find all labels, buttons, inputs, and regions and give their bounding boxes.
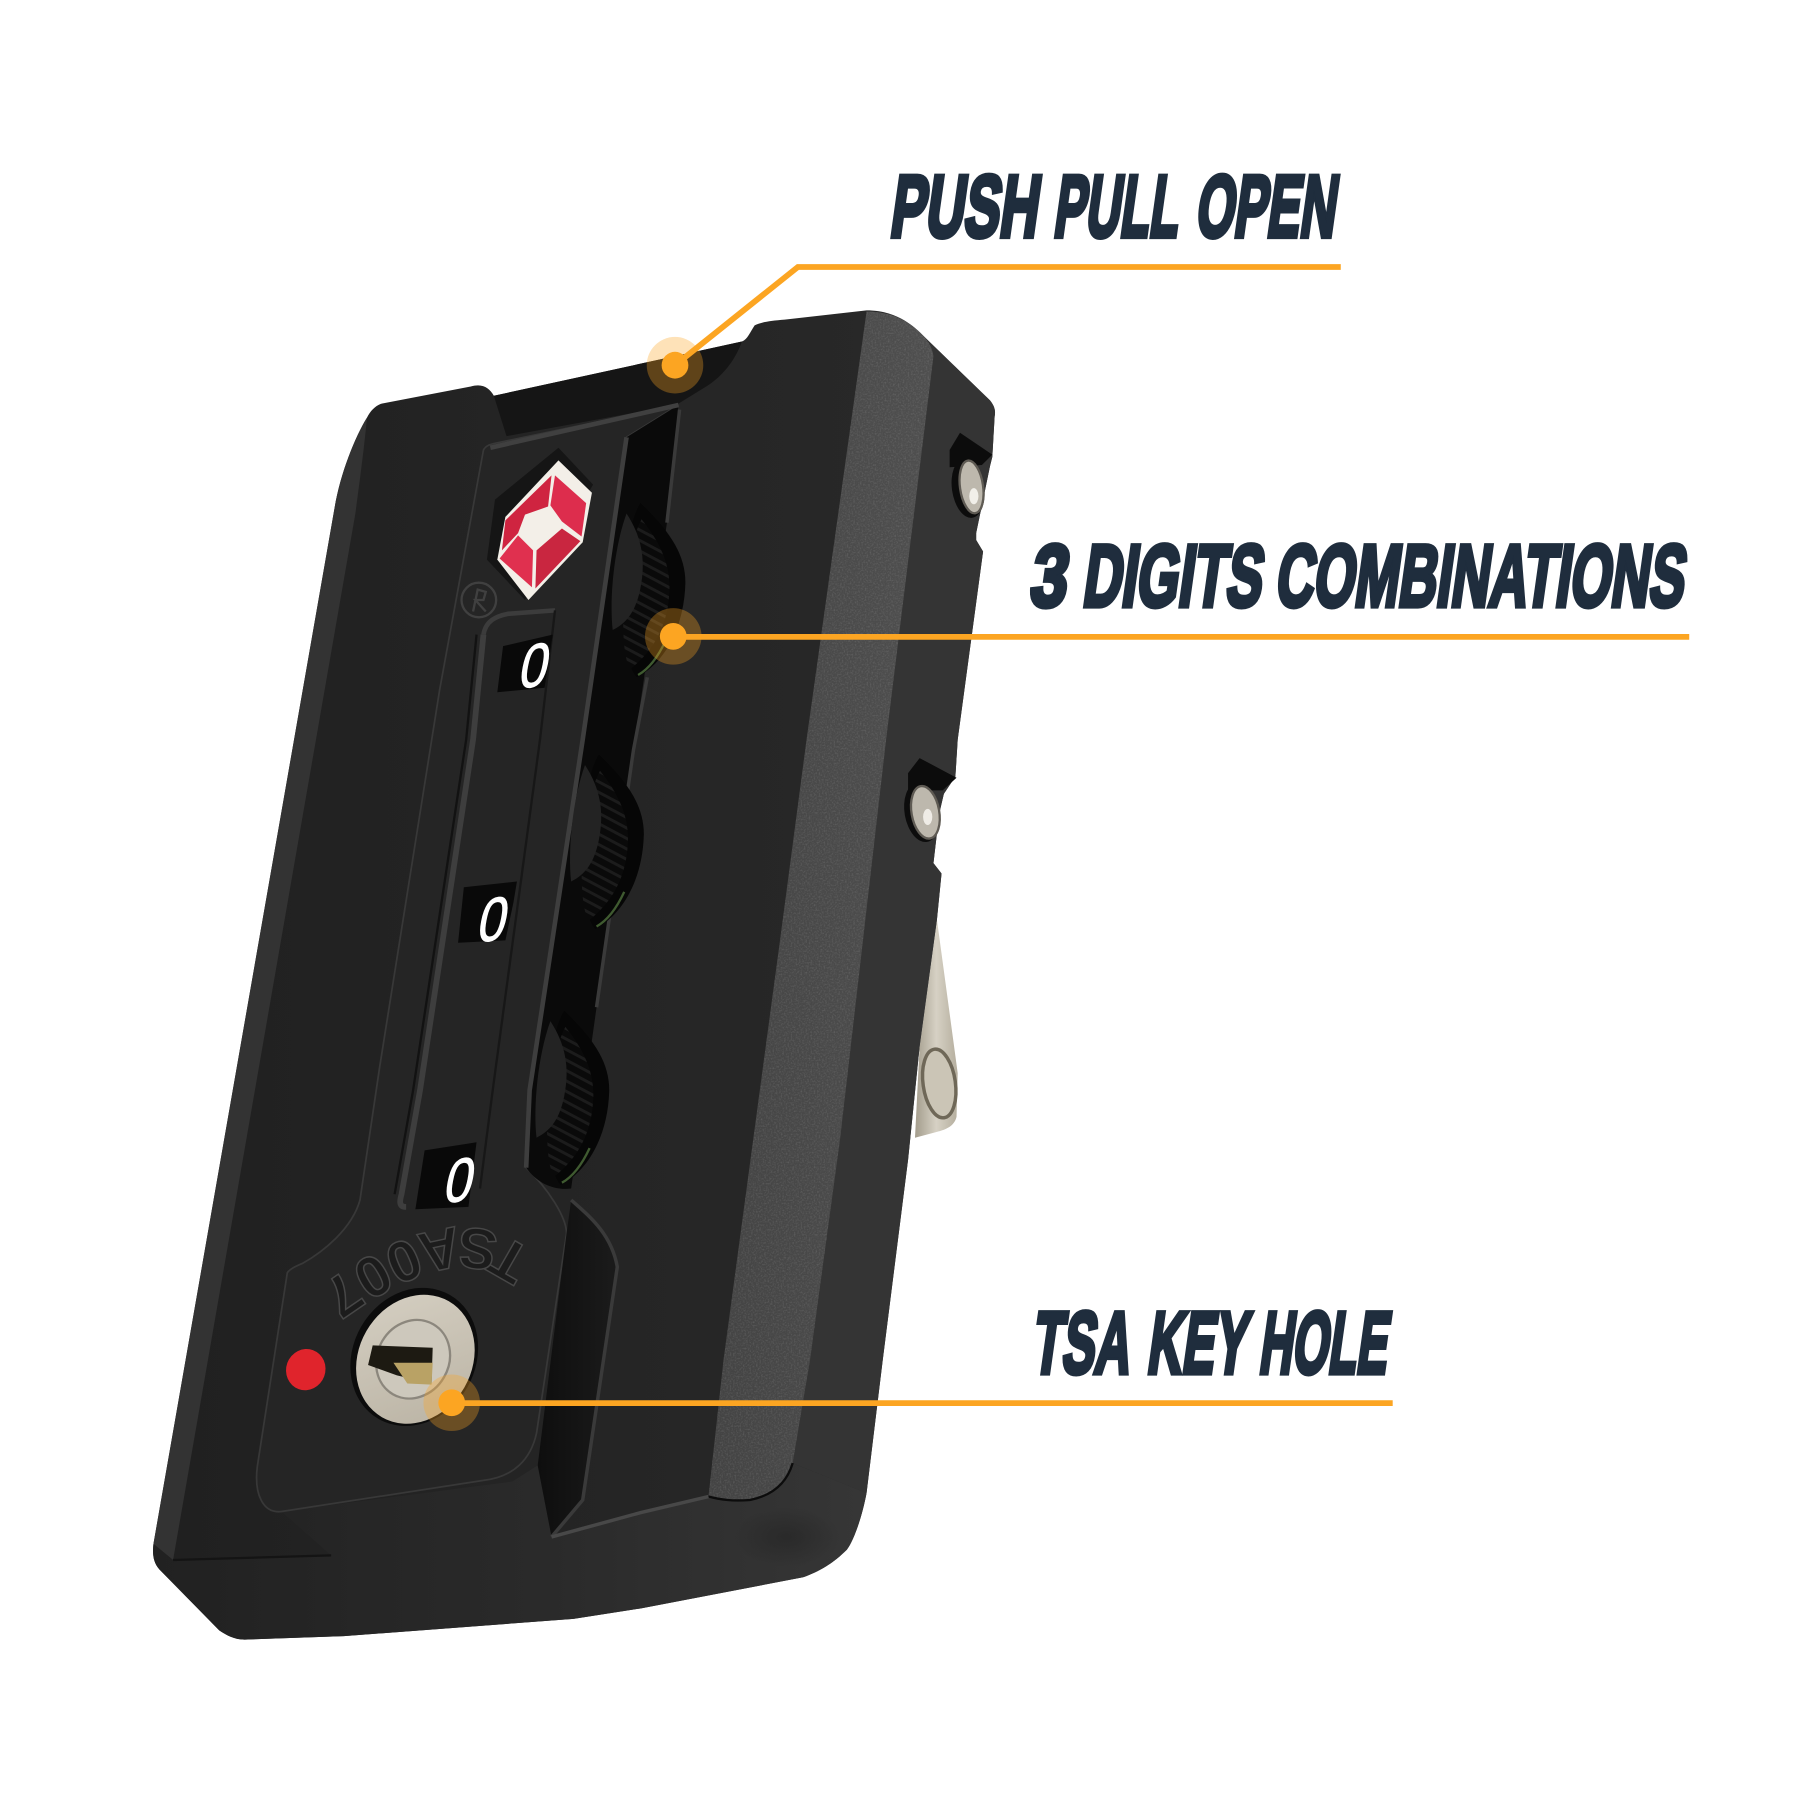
heading: push pull open: OPEN [1192, 157, 1345, 255]
right side wall [793, 330, 995, 1493]
digit window strip [395, 610, 555, 1207]
rear latch pin [915, 920, 960, 1138]
heading: push pull open: PUSH [886, 157, 1047, 255]
dial plate [257, 405, 678, 1512]
heading: TSA key hole: KEY [1143, 1293, 1256, 1392]
lock photo illustration [153, 310, 996, 1640]
upper side screw [948, 433, 992, 520]
red indicator dot [280, 1343, 331, 1396]
lock body silhouette [153, 310, 995, 1640]
marker: TSA key hole [423, 1374, 480, 1431]
left edge bevel [153, 418, 367, 1560]
lower side screw [900, 758, 957, 845]
dial wheel 2 [570, 755, 644, 929]
marker: 3 digits combinations [645, 608, 702, 665]
heading: TSA key hole [1028, 1293, 1397, 1392]
heading: 3 digits combinations [1025, 526, 1693, 625]
channel ridges [490, 405, 708, 1537]
marker: push pull open [647, 337, 703, 393]
key cylinder [326, 1264, 503, 1449]
digit 0 bottom [415, 1142, 481, 1218]
digit 0 top [497, 629, 556, 703]
digit 0 middle: 0 [473, 883, 515, 957]
bottom face [153, 1463, 867, 1640]
dial wheel 3 [535, 1011, 609, 1185]
callout: TSA key hole [423, 1293, 1397, 1431]
leader line: TSA key hole [452, 1401, 1393, 1406]
infographic: TSA lock with callouts [153, 172, 1690, 1640]
centre channel [526, 405, 678, 1189]
heading: 3 digits combinations: DIGITS [1078, 526, 1271, 625]
callout: 3 digits combinations [645, 526, 1693, 665]
callout: push pull open [647, 157, 1345, 393]
registered mark [462, 583, 496, 617]
heading: TSA key hole: TSA [1028, 1293, 1140, 1392]
heading: 3 digits combinations: 3 [1025, 526, 1076, 625]
leader line: 3 digits combinations [673, 634, 1689, 639]
light chamfer band [708, 312, 934, 1500]
TSA diamond logo [487, 448, 593, 600]
digit 0 top: 0 [514, 629, 556, 703]
heading: push pull open: PULL [1050, 157, 1188, 255]
dial wheel 1 [612, 503, 685, 677]
digit 0 bottom: 0 [439, 1144, 481, 1218]
heading: TSA key hole: HOLE [1255, 1293, 1397, 1392]
embossed TSA007 text: TSA007 [330, 1226, 524, 1320]
leader line: push pull open [675, 267, 1341, 365]
heading: push pull open [886, 157, 1345, 255]
lower slot [538, 1200, 617, 1537]
top recess for push-pull button [494, 342, 742, 436]
